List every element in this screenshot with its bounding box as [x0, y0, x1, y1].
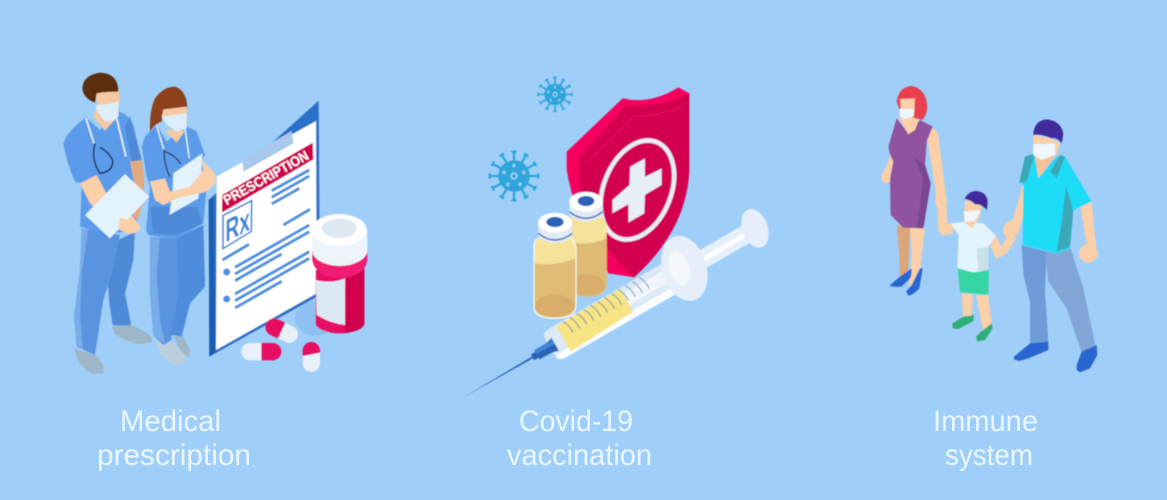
nozzle	[529, 338, 559, 364]
panel: medical prescription	[63, 73, 367, 374]
syringe	[455, 205, 774, 412]
virus small	[538, 78, 572, 111]
shield ring	[587, 129, 688, 251]
plunger end	[736, 205, 774, 251]
cross	[612, 158, 662, 223]
label: Immune system: Immune	[933, 405, 1038, 438]
label: Covid-19 vaccination	[507, 405, 652, 472]
label: Covid-19 vaccination: vaccination	[507, 439, 652, 472]
shield	[567, 87, 689, 277]
panel: immune system	[881, 86, 1098, 372]
label: Medical prescription	[97, 405, 251, 472]
barrel	[542, 255, 694, 362]
pill bottle	[295, 214, 367, 336]
child	[937, 191, 1016, 342]
rx box: Rx	[225, 200, 250, 250]
graduations	[563, 276, 649, 334]
woman	[881, 86, 947, 296]
vial front	[534, 213, 576, 318]
panel: covid-19 vaccination	[455, 78, 774, 412]
man	[1003, 119, 1098, 372]
male doctor	[63, 73, 152, 374]
vial back	[569, 192, 607, 297]
liquid	[556, 289, 635, 352]
label: Immune system	[933, 405, 1038, 472]
female doctor	[142, 87, 216, 365]
text lines	[222, 170, 310, 308]
flange	[654, 230, 715, 307]
needle	[463, 356, 533, 398]
label: Medical prescription: Medical	[120, 405, 221, 438]
label: Medical prescription: prescription	[97, 439, 251, 472]
label: Covid-19 vaccination: Covid-19	[519, 405, 633, 438]
plunger rod	[681, 222, 758, 277]
clipboard	[209, 101, 320, 357]
pill capsules	[241, 316, 320, 372]
prescription banner: PRESCRIPTION	[220, 147, 311, 208]
clip	[242, 131, 293, 172]
label: Immune system: system	[945, 439, 1033, 472]
virus large	[490, 152, 538, 200]
